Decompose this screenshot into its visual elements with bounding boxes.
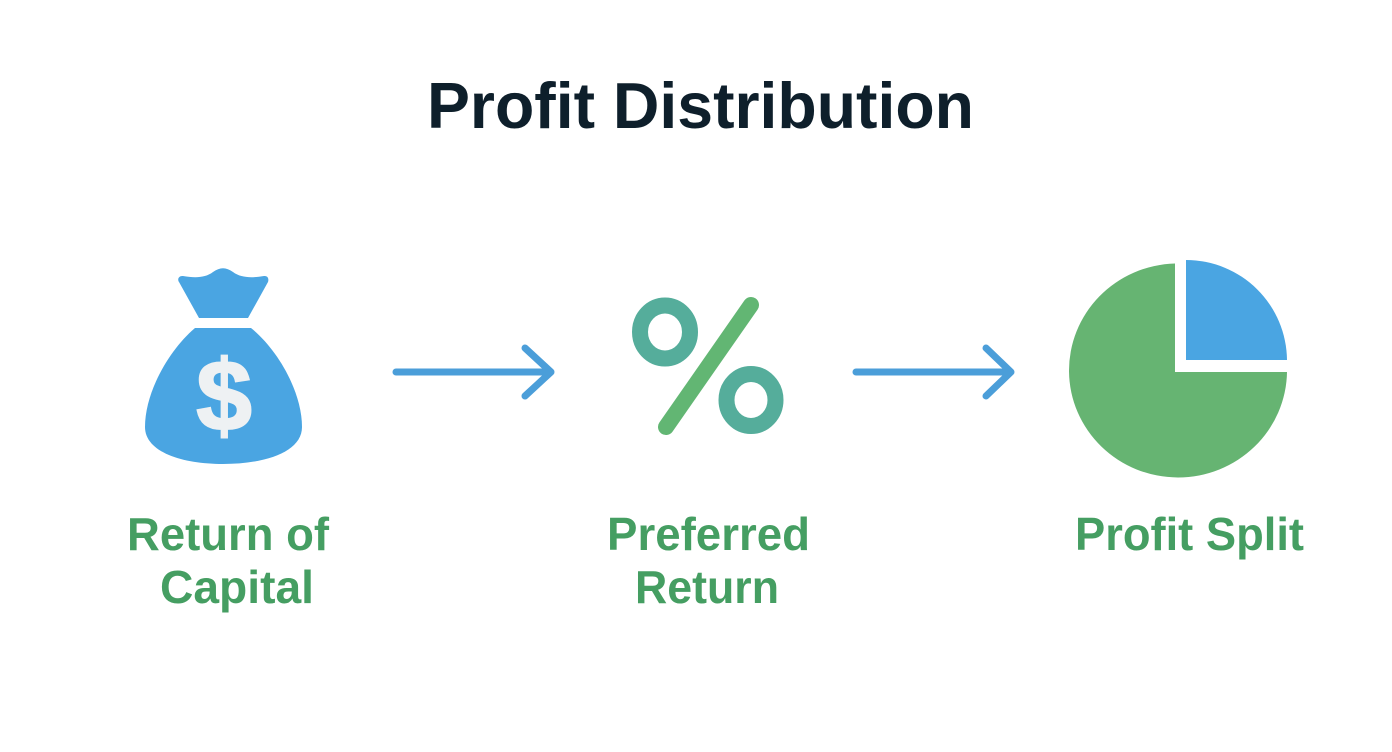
- label: profit split: Profit Split: [1075, 508, 1304, 560]
- label: return of capital: [127, 508, 330, 613]
- label: return of capital: Return of: [127, 508, 330, 560]
- label: preferred return: Preferred: [607, 508, 810, 560]
- label: preferred return: [607, 508, 810, 613]
- icon: percent sign: [640, 305, 776, 427]
- label: preferred return: Return: [635, 561, 779, 613]
- arrow: preferred return to profit split: [856, 348, 1011, 396]
- icon: money bag: [145, 268, 302, 464]
- arrow: return of capital to preferred return: [396, 348, 551, 396]
- chart: profit split pie: [1069, 260, 1287, 477]
- label: return of capital: Capital: [160, 561, 314, 613]
- title: Profit Distribution: [427, 69, 974, 142]
- icon: money bag: $: [196, 340, 252, 452]
